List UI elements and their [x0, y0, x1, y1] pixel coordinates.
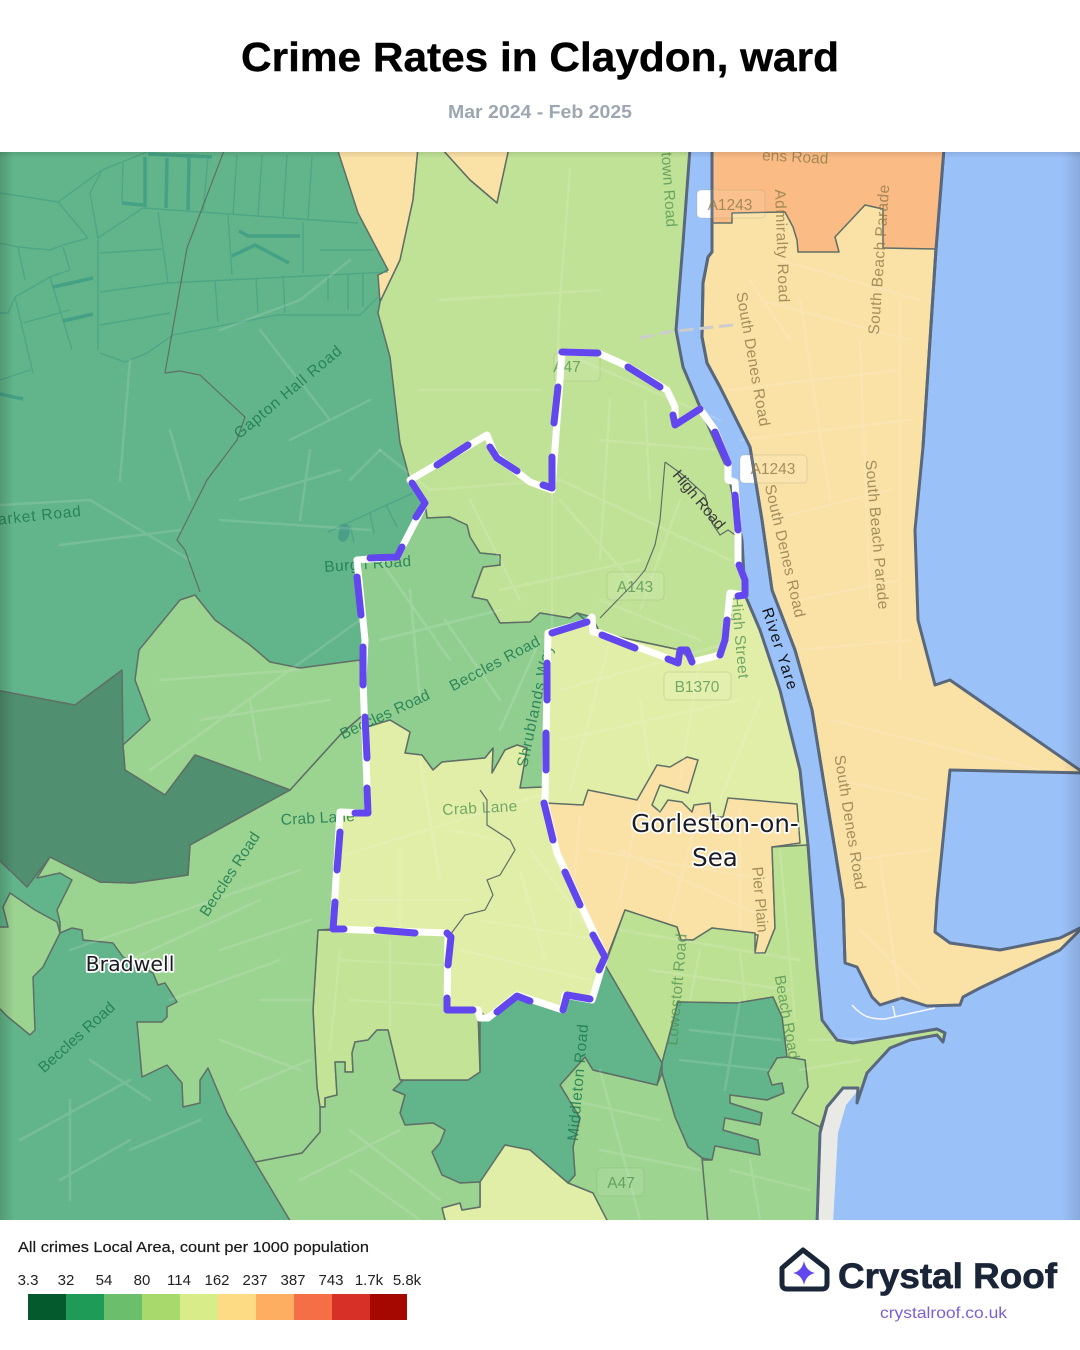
zone: pale south I: [442, 1145, 609, 1224]
road labels: South Denes Road: [732, 291, 773, 428]
road labels: Burgh Road: [324, 553, 412, 576]
place label: Gorleston-on-Sea: Gorleston-on-: [631, 809, 799, 838]
road labels: High Road: [669, 467, 728, 533]
street network: [0, 170, 1040, 1220]
title: Crime Rates in Claydon, ward: [241, 34, 839, 80]
legend scale labels: 162: [204, 1272, 230, 1289]
zone: darkest green: [0, 670, 290, 887]
zone: green J middle south: [560, 1057, 708, 1224]
road labels: A47: [553, 359, 581, 376]
road labels: A1243: [708, 197, 752, 214]
north-west drains: [0, 152, 413, 543]
road labels: Shrublands Way: [514, 643, 557, 769]
road labels: Beccles Road: [338, 687, 433, 743]
water background: [678, 152, 1080, 1220]
zone: light green central: [378, 148, 745, 662]
zone: green C: [123, 595, 363, 795]
harbour basin line: [852, 1005, 935, 1019]
road labels: A1243: [751, 461, 795, 478]
website url: crystalroof.co.uk: [880, 1305, 1008, 1322]
zone: green D south-west: [37, 715, 368, 1162]
zone: light green F: [313, 930, 480, 1107]
icon: house with star: [782, 1250, 827, 1289]
inner zone boundaries: [165, 148, 738, 935]
road labels: Lowestoft Road: [664, 933, 691, 1046]
zone: medium green Beccles: [357, 503, 587, 788]
road labels: Beach Road: [771, 974, 802, 1061]
legend scale labels: 3.3: [18, 1272, 38, 1289]
road shields: [554, 190, 807, 1196]
zone: green Q south-east: [700, 1057, 820, 1224]
road labels: B1370: [675, 679, 720, 696]
legend scale labels: [18, 1272, 422, 1289]
road labels: South Denes Road: [761, 483, 808, 619]
zone: dark green H: [393, 965, 662, 1183]
zone: peach Gorleston: [545, 757, 800, 957]
road shields under land: [697, 190, 710, 218]
legend scale labels: 237: [242, 1272, 268, 1289]
zone: green G: [255, 1030, 480, 1224]
river banks: [676, 148, 945, 1224]
wordmark: Crystal Roof: [838, 1257, 1057, 1296]
legend: [18, 1239, 422, 1320]
map edge vignette: [0, 152, 1080, 1220]
road labels: A143: [617, 579, 653, 596]
legend scale labels: 743: [318, 1272, 344, 1289]
road labels: Beccles Road: [35, 999, 119, 1076]
logo: Crystal Roof: [782, 1250, 1057, 1322]
legend scale labels: 80: [134, 1272, 150, 1289]
road labels: ens Road: [762, 147, 829, 168]
zone: orange north: [712, 148, 944, 252]
place label: Gorleston-on-Sea: Sea: [692, 843, 738, 872]
road labels: town Road: [657, 152, 680, 228]
place label: Bradwell: Bradwell: [86, 952, 174, 976]
road labels: High Street: [727, 596, 752, 680]
zone: east land peach: [702, 148, 1080, 1006]
road labels: Crab Lane: [442, 798, 518, 819]
subtitle: date range: Mar 2024 - Feb 2025: [448, 102, 632, 122]
road labels: River Yare: [758, 606, 800, 692]
road labels: South Beach Parade: [861, 459, 891, 610]
road labels: Admiralty Road: [771, 189, 792, 303]
zone: peach north tip: [337, 148, 418, 302]
legend scale labels: 1.7k: [355, 1272, 384, 1289]
legend scale labels: 387: [280, 1272, 306, 1289]
road labels: A47: [607, 1175, 635, 1192]
road labels: Gapton Hall Road: [231, 343, 345, 442]
legend colour bar: [28, 1294, 407, 1320]
legend scale labels: 5.8k: [393, 1272, 422, 1289]
road labels: [0, 147, 893, 1192]
railway line: [640, 325, 733, 338]
road labels: Beccles Road: [447, 633, 543, 695]
road labels: Middleton Road: [565, 1024, 592, 1142]
legend scale labels: 32: [58, 1272, 74, 1289]
choropleth map: [0, 147, 1080, 1224]
ward boundary: Claydon: [333, 352, 745, 1018]
legend scale labels: 114: [167, 1272, 191, 1289]
beach: [818, 1090, 856, 1220]
zone: lighter green south-east: [605, 845, 945, 1127]
zone: pale Claydon south: [333, 593, 808, 1018]
zone: dark green K: [662, 997, 787, 1160]
legend scale labels: 54: [96, 1272, 112, 1289]
zone: west base green: [0, 152, 705, 1220]
road labels: South Beach Parade: [866, 184, 893, 335]
legend title: All crimes Local Area, count per 1000 population: [18, 1239, 369, 1256]
road labels: Crab Lane: [280, 808, 355, 829]
road labels: Pier Plain: [748, 866, 771, 933]
road labels: Beccles Road: [197, 829, 264, 920]
road labels: South Denes Road: [830, 754, 868, 891]
